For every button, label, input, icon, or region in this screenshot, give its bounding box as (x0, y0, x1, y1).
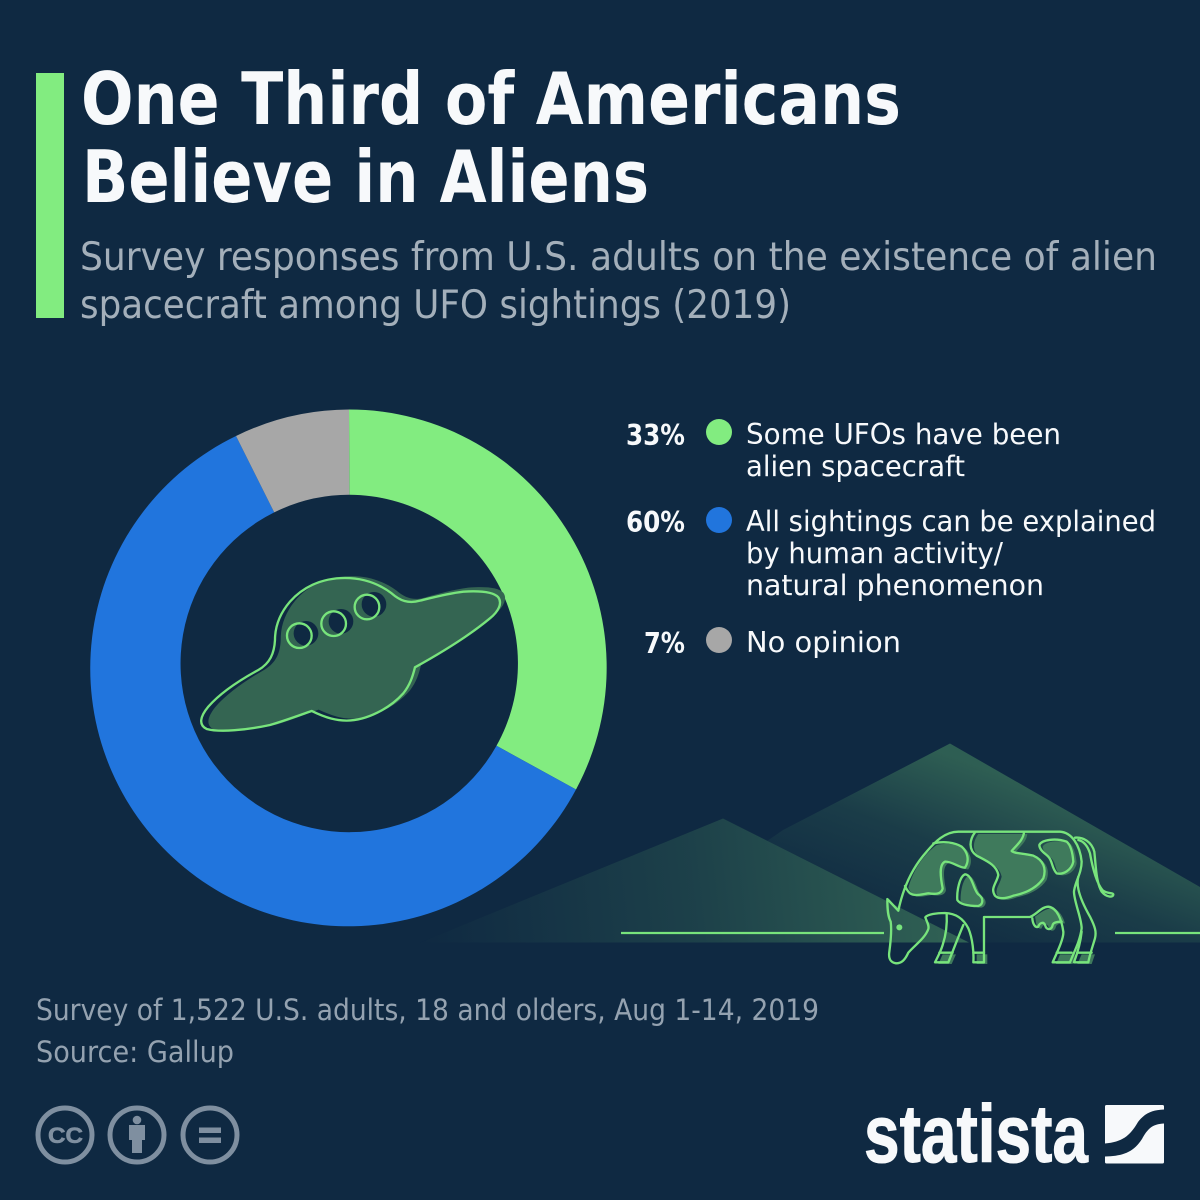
cow udder (1032, 918, 1062, 929)
license icons (38, 1108, 237, 1162)
legend item: 7%: No opinion (746, 626, 901, 659)
legend item: 33%: alien spacecraft (746, 450, 965, 483)
logo mark (1105, 1105, 1164, 1164)
legend item: 7%: 7% (644, 627, 685, 660)
legend item: 60%: natural phenomenon (746, 569, 1044, 602)
segment: some UFOs alien 33% (349, 410, 607, 790)
ground line (621, 932, 1200, 934)
subtitle: spacecraft among UFO sightings (2019) (80, 283, 791, 328)
legend item: 33%: Some UFOs have been (746, 418, 1061, 451)
UFO window rings (287, 595, 379, 648)
legend item: 7% (644, 626, 901, 660)
cow rear leg (1074, 877, 1096, 962)
icon: creative commons: CC (48, 1123, 83, 1148)
legend item: 60% (626, 505, 1156, 602)
footer notes: Survey of 1,522 U.S. adults, 18 and olders, Aug 1-14, 2019 (36, 993, 819, 1027)
icon: UFO (201, 573, 507, 731)
footer notes (36, 993, 819, 1069)
segment: no opinion 7% (236, 410, 349, 512)
UFO shadow fill (206, 573, 507, 731)
icon: creative commons (38, 1108, 92, 1162)
title: Believe in Aliens (82, 135, 649, 219)
cow spot fills (908, 834, 1095, 964)
cow spots (905, 842, 968, 895)
accent bar (36, 73, 64, 318)
wordmark: statista (864, 1089, 1089, 1180)
cow tail (1075, 838, 1113, 897)
UFO outline (201, 578, 500, 731)
cow hooves (939, 949, 1092, 956)
legend item: 33%: 33% (626, 419, 685, 452)
UFO window shadows (294, 592, 386, 646)
legend item: 60%: by human activity/ (746, 537, 1003, 570)
cow outline (887, 832, 1113, 963)
segment: human or natural explanation 60% (90, 436, 576, 926)
cow front leg (935, 913, 963, 962)
icon: cow (887, 832, 1113, 964)
legend item: 60%: 60% (626, 506, 685, 539)
icon: attribution (110, 1108, 164, 1162)
title: One Third of Americans (81, 57, 901, 141)
title (81, 57, 901, 219)
donut chart (90, 410, 607, 926)
legend item: 60%: All sightings can be explained (746, 505, 1156, 538)
mountains (420, 744, 1200, 942)
footer notes: Source: Gallup (36, 1035, 234, 1069)
icon: no derivatives (183, 1108, 237, 1162)
cow eye (896, 924, 902, 930)
legend (626, 418, 1156, 660)
subtitle (80, 235, 1157, 328)
legend item: 33% (626, 418, 1061, 483)
statista logo (864, 1089, 1164, 1180)
